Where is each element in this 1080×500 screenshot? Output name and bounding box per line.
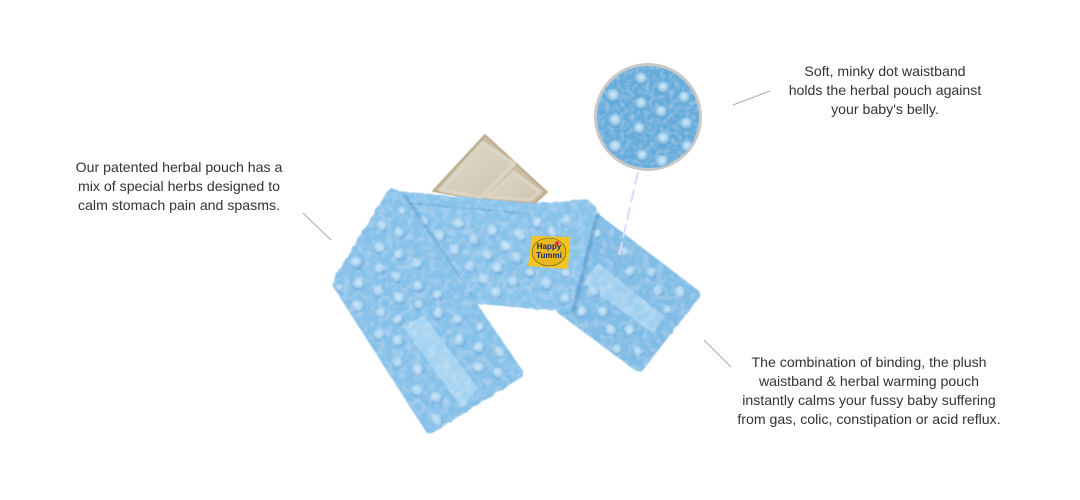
dashed connector [618,172,638,260]
caption: minky dot waistband: your baby's belly. [831,101,939,117]
caption: minky dot waistband: Soft, minky dot waistband [804,63,966,79]
caption: herbal pouch: mix of special herbs designed to [78,178,280,194]
brand label: Happy [537,242,562,251]
caption: combination benefits: waistband & herbal warming pouch [759,373,979,389]
caption: minky dot waistband: holds the herbal pouch against [789,82,981,98]
leader line: combination note [704,340,731,367]
herbal pouch [433,135,547,204]
caption: herbal pouch: Our patented herbal pouch has a [76,159,282,175]
middle fold shadow [573,212,598,312]
caption: minky dot waistband [789,63,982,117]
product illustration [302,63,770,434]
waistband middle [400,192,596,311]
caption: combination benefits: from gas, colic, constipation or acid reflux. [737,411,1001,427]
waistband right end [558,214,699,371]
caption: combination benefits: instantly calms your fussy baby suffering [742,392,996,408]
leader line: pouch note [303,213,331,240]
fold shadow [404,196,472,300]
waistband left strap [333,188,522,433]
leader line: waistband note [733,91,770,105]
velcro strip left [403,315,478,408]
velcro strip right [583,263,665,333]
caption: combination benefits [737,354,1001,427]
caption: herbal pouch: calm stomach pain and spasms. [78,197,280,213]
caption: herbal pouch [76,159,282,213]
brand label: Tummi [536,251,562,260]
caption: combination benefits: The combination of binding, the plush [751,354,987,370]
brand label [528,236,570,269]
magnified fabric circle [594,63,702,171]
